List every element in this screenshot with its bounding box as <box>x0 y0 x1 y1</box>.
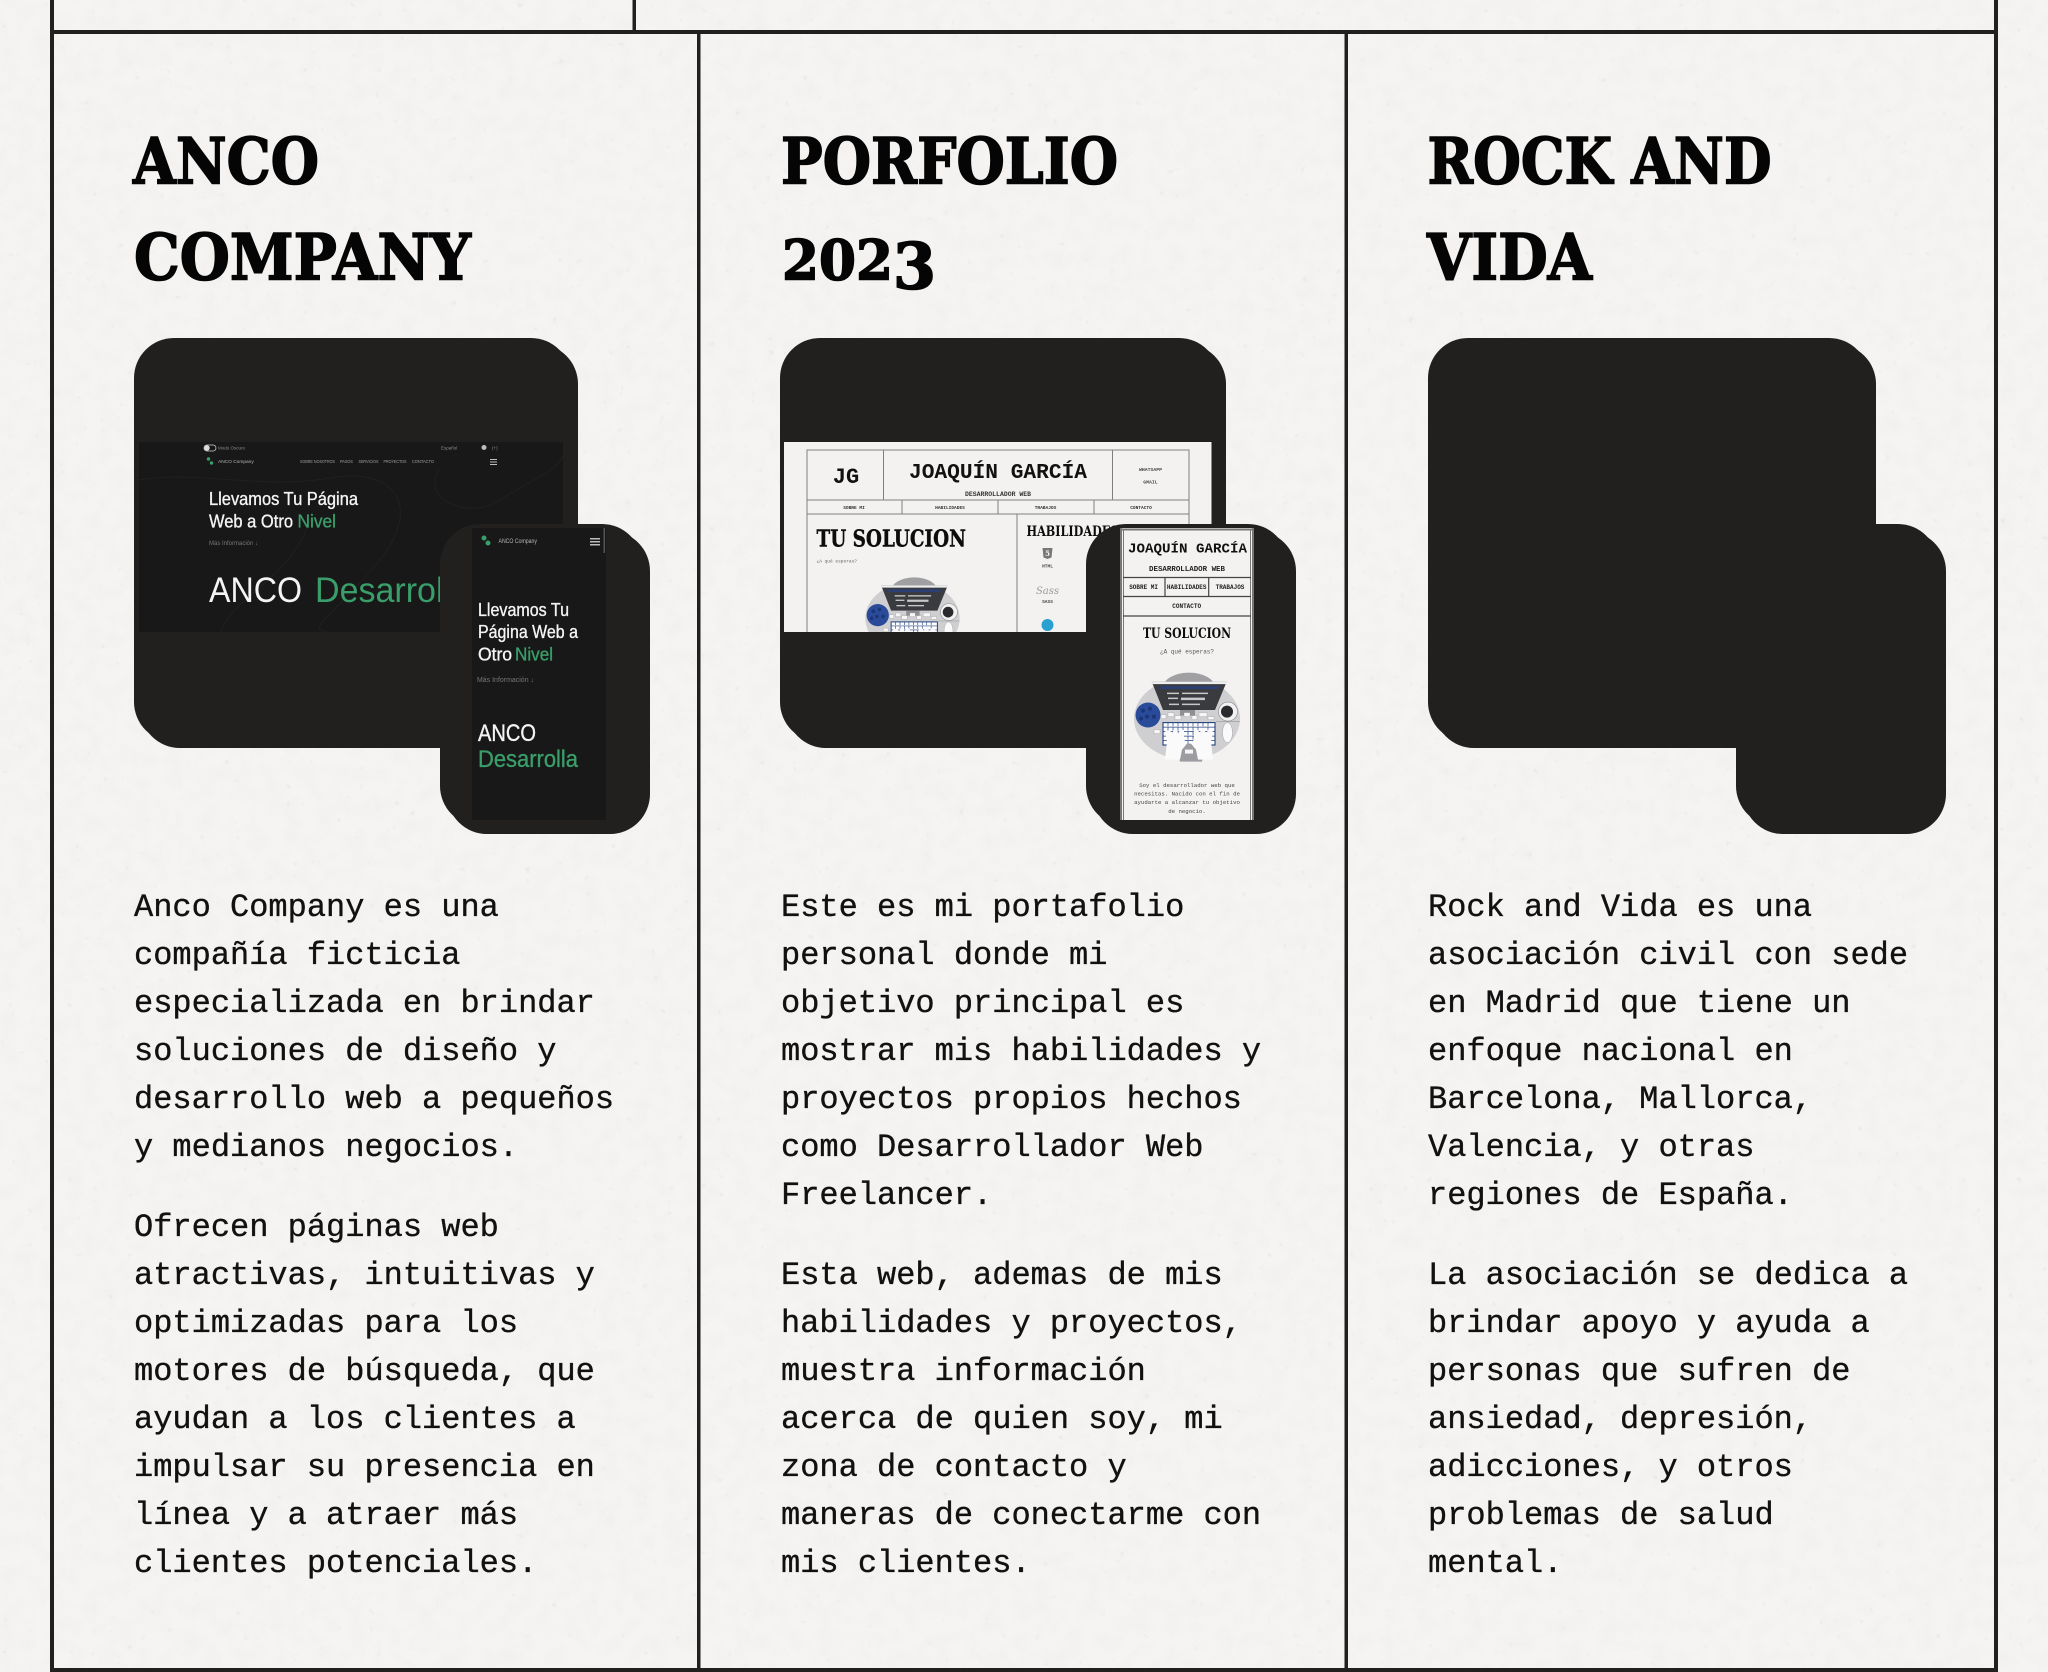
desktop screen: HTML <box>1042 564 1053 570</box>
phone screen: de negocio. <box>1168 808 1206 815</box>
text block: Rock and Vida description: regiones de España. <box>1428 1177 1793 1214</box>
text block: Rock and Vida description: adicciones, y otros <box>1428 1449 1793 1486</box>
heading: PORFOLIO 2023: PORFOLIO <box>781 124 1118 200</box>
text block: Porfolio 2023 description: maneras de conectarme con <box>781 1497 1261 1534</box>
text block: Porfolio 2023 description: objetivo principal es <box>781 985 1184 1022</box>
desktop frame <box>134 338 578 748</box>
phone screen: necesitas. Nacido con el fin de <box>1134 791 1240 798</box>
desktop screen: CONTACTO <box>1130 505 1152 511</box>
text block: Porfolio 2023 description: mis clientes. <box>781 1545 1031 1582</box>
text block: Rock and Vida description: asociación civil con sede <box>1428 937 1908 974</box>
desktop screen: JOAQUÍN GARCÍA <box>909 461 1087 485</box>
text block: Porfolio 2023 description <box>781 889 1261 1582</box>
heading: ROCK AND VIDA <box>1426 124 1772 296</box>
heading: ROCK AND VIDA: VIDA <box>1426 220 1593 296</box>
text block: Anco Company description: impulsar su presencia en <box>134 1449 595 1486</box>
heading: PORFOLIO 2023 <box>781 124 1118 304</box>
desktop screen: TRABAJOS <box>1035 505 1057 511</box>
text block: Anco Company description: motores de búsqueda, que <box>134 1353 595 1390</box>
text block: Anco Company description <box>134 889 614 1582</box>
text block: Rock and Vida description: Rock and Vida es una <box>1428 889 1812 926</box>
phone screen: HABILIDADES <box>1167 584 1207 591</box>
text block: Porfolio 2023 description: acerca de quien soy, mi <box>781 1401 1223 1438</box>
text block: Rock and Vida description: La asociación se dedica a <box>1428 1257 1908 1294</box>
phone screen: ¿A qué esperas? <box>1160 649 1214 656</box>
phone screen: Otro <box>478 644 512 664</box>
text block: Rock and Vida description: problemas de salud <box>1428 1497 1774 1534</box>
text block: Porfolio 2023 description: Freelancer. <box>781 1177 992 1214</box>
desktop screen <box>784 442 1212 632</box>
phone screen: Desarrolla <box>478 746 579 773</box>
phone screen: ANCO Company <box>498 538 538 545</box>
text block: Rock and Vida description: ansiedad, depresión, <box>1428 1401 1812 1438</box>
text block: Anco Company description: atractivas, intuitivas y <box>134 1257 595 1294</box>
desktop screen: Llevamos Tu Página <box>209 489 359 509</box>
desktop screen: JG <box>833 465 859 490</box>
phone screen: Llevamos Tu <box>478 600 569 620</box>
phone screen: DESARROLLADOR WEB <box>1149 566 1225 574</box>
desktop screen: Español <box>441 446 457 450</box>
text block: Porfolio 2023 description: proyectos propios hechos <box>781 1081 1242 1118</box>
desktop screen <box>139 442 563 632</box>
desktop screen: DESARROLLADOR WEB <box>965 491 1031 498</box>
mockup: Rock and Vida (blank dark placeholder) <box>1428 338 1946 834</box>
illustration: laptop desk, phone <box>1134 673 1240 762</box>
desktop screen: SOBRE MI <box>843 505 865 511</box>
phone screen <box>1120 528 1254 820</box>
text block: Anco Company description: línea y a atraer más <box>134 1497 518 1534</box>
text block: Porfolio 2023 description: Esta web, ademas de mis <box>781 1257 1223 1294</box>
heading: PORFOLIO 2023: 202 <box>782 228 893 292</box>
desktop screen: TU SOLUCION <box>816 526 966 552</box>
text block: Rock and Vida description: Barcelona, Mallorca, <box>1428 1081 1812 1118</box>
phone screen: ANCO <box>478 720 536 747</box>
desktop screen: CONTACTO <box>412 459 434 464</box>
heading: ANCO COMPANY: COMPANY <box>134 220 472 296</box>
desktop screen: WHATSAPP <box>1139 467 1162 473</box>
mockup: Anco Company <box>134 338 650 834</box>
phone screen: TRABAJOS <box>1216 584 1245 591</box>
text block: Rock and Vida description: brindar apoyo y ayuda a <box>1428 1305 1870 1342</box>
desktop screen: Sass <box>1036 586 1059 597</box>
text block: Porfolio 2023 description: como Desarrollador Web <box>781 1129 1203 1166</box>
text block: Rock and Vida description: mental. <box>1428 1545 1562 1582</box>
main artwork layer: headings and mockups <box>132 135 1946 834</box>
phone screen: Soy el desarrollador web que <box>1139 782 1235 789</box>
desktop screen: 5 <box>1045 549 1050 558</box>
desktop screen: SERVICIOS <box>358 459 378 464</box>
desktop screen: ANCO Company <box>218 459 254 465</box>
heading: ANCO COMPANY: ANCO <box>132 124 319 200</box>
text block: Porfolio 2023 description: zona de contacto y <box>781 1449 1127 1486</box>
text block: Rock and Vida description <box>1428 889 1908 1582</box>
text block: Anco Company description: especializada en brindar <box>134 985 595 1022</box>
heading: ROCK AND VIDA: ROCK AND <box>1428 124 1772 200</box>
text block: Anco Company description: compañía ficticia <box>134 937 460 974</box>
text block: Anco Company description: optimizadas para los <box>134 1305 518 1342</box>
text block: Porfolio 2023 description: habilidades y proyectos, <box>781 1305 1242 1342</box>
text block: Rock and Vida description: enfoque nacional en <box>1428 1033 1793 1070</box>
text block: Anco Company description: y medianos negocios. <box>134 1129 518 1166</box>
text block: Anco Company description: Anco Company es una <box>134 889 499 926</box>
phone screen: TU SOLUCION <box>1143 626 1231 642</box>
text block: Rock and Vida description: personas que sufren de <box>1428 1353 1850 1390</box>
text block: Porfolio 2023 description: mostrar mis habilidades y <box>781 1033 1261 1070</box>
text block: Anco Company description: clientes potenciales. <box>134 1545 537 1582</box>
heading: PORFOLIO 2023: 3 <box>893 230 936 304</box>
phone frame <box>440 524 650 834</box>
text block: Rock and Vida description: en Madrid que tiene un <box>1428 985 1850 1022</box>
desktop screen: SASS <box>1042 599 1053 605</box>
desktop screen: PASOS <box>340 459 353 464</box>
desktop screen: (+) <box>492 446 498 450</box>
text block: Porfolio 2023 description: personal donde mi <box>781 937 1107 974</box>
phone screen: Página Web a <box>478 622 579 642</box>
text block: Porfolio 2023 description: muestra información <box>781 1353 1146 1390</box>
desktop screen: ¿A qué esperas? <box>816 558 857 564</box>
desktop screen: HABILIDADES <box>935 505 965 511</box>
desktop screen: SOBRE NOSOTROS <box>300 459 335 464</box>
desktop screen: Modo Oscuro <box>218 446 246 450</box>
phone screen: SOBRE MI <box>1129 584 1158 591</box>
desktop screen: PROYECTOS <box>384 459 406 464</box>
phone screen <box>472 528 606 820</box>
phone frame <box>1086 524 1296 834</box>
phone screen: Nivel <box>515 644 553 664</box>
illustration: laptop desk, desktop <box>865 577 960 632</box>
text block: Rock and Vida description: Valencia, y otras <box>1428 1129 1754 1166</box>
mockup: Porfolio 2023 <box>780 338 1296 834</box>
desktop screen: Desarrolla <box>315 571 471 610</box>
desktop screen: Web a Otro <box>209 512 293 532</box>
desktop screen: GMAIL <box>1143 480 1158 486</box>
desktop frame <box>780 338 1226 748</box>
phone screen: ayudarte a alcanzar tu objetivo <box>1134 799 1240 806</box>
phone screen: CONTACTO <box>1172 603 1201 610</box>
desktop screen: Más Información ↓ <box>209 540 258 547</box>
desktop screen: HABILIDADES <box>1026 524 1118 540</box>
text block: Anco Company description: desarrollo web a pequeños <box>134 1081 614 1118</box>
phone screen: Más Información ↓ <box>477 677 534 684</box>
desktop screen: ANCO <box>209 571 302 610</box>
desktop screen: Nivel <box>298 512 336 532</box>
heading: ANCO COMPANY <box>132 124 472 296</box>
text block: Anco Company description: soluciones de diseño y <box>134 1033 556 1070</box>
text block: Anco Company description: Ofrecen páginas web <box>134 1209 499 1246</box>
text block: Porfolio 2023 description: Este es mi portafolio <box>781 889 1184 926</box>
phone screen: JOAQUÍN GARCÍA <box>1128 540 1248 558</box>
text block: Anco Company description: ayudan a los clientes a <box>134 1401 576 1438</box>
